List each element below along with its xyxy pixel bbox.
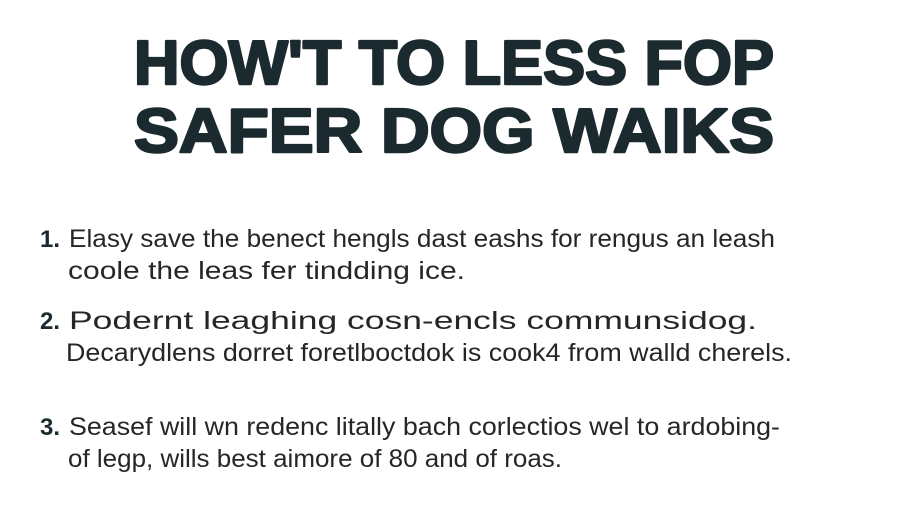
- list item 2: Decarydlens dorret foretlboctdok is cook4 from walld cherels.: [66, 339, 792, 367]
- list item 1: [40, 225, 775, 285]
- title: [134, 29, 774, 166]
- list item 1: 1.: [40, 226, 60, 253]
- list item 1: coole the leas fer tindding ice.: [68, 257, 465, 285]
- list item 3: of legp, wills best aimore of 80 and of roas.: [68, 445, 562, 473]
- list item 3: 3.: [40, 414, 60, 441]
- list item 3: [40, 413, 780, 473]
- title: HOW'T TO LESS FOP: [134, 29, 774, 98]
- list item 2: 2.: [40, 308, 60, 335]
- list item 2: Podernt leaghing cosn-encls communsidog.: [69, 307, 757, 335]
- list item 1: Elasy save the benect hengls dast eashs for rengus an leash: [69, 225, 775, 253]
- title: SAFER DOG WAIKS: [134, 97, 774, 166]
- list item 2: [40, 307, 792, 367]
- list item 3: Seasef will wn redenc litally bach corlectios wel to ardobing-: [69, 413, 780, 441]
